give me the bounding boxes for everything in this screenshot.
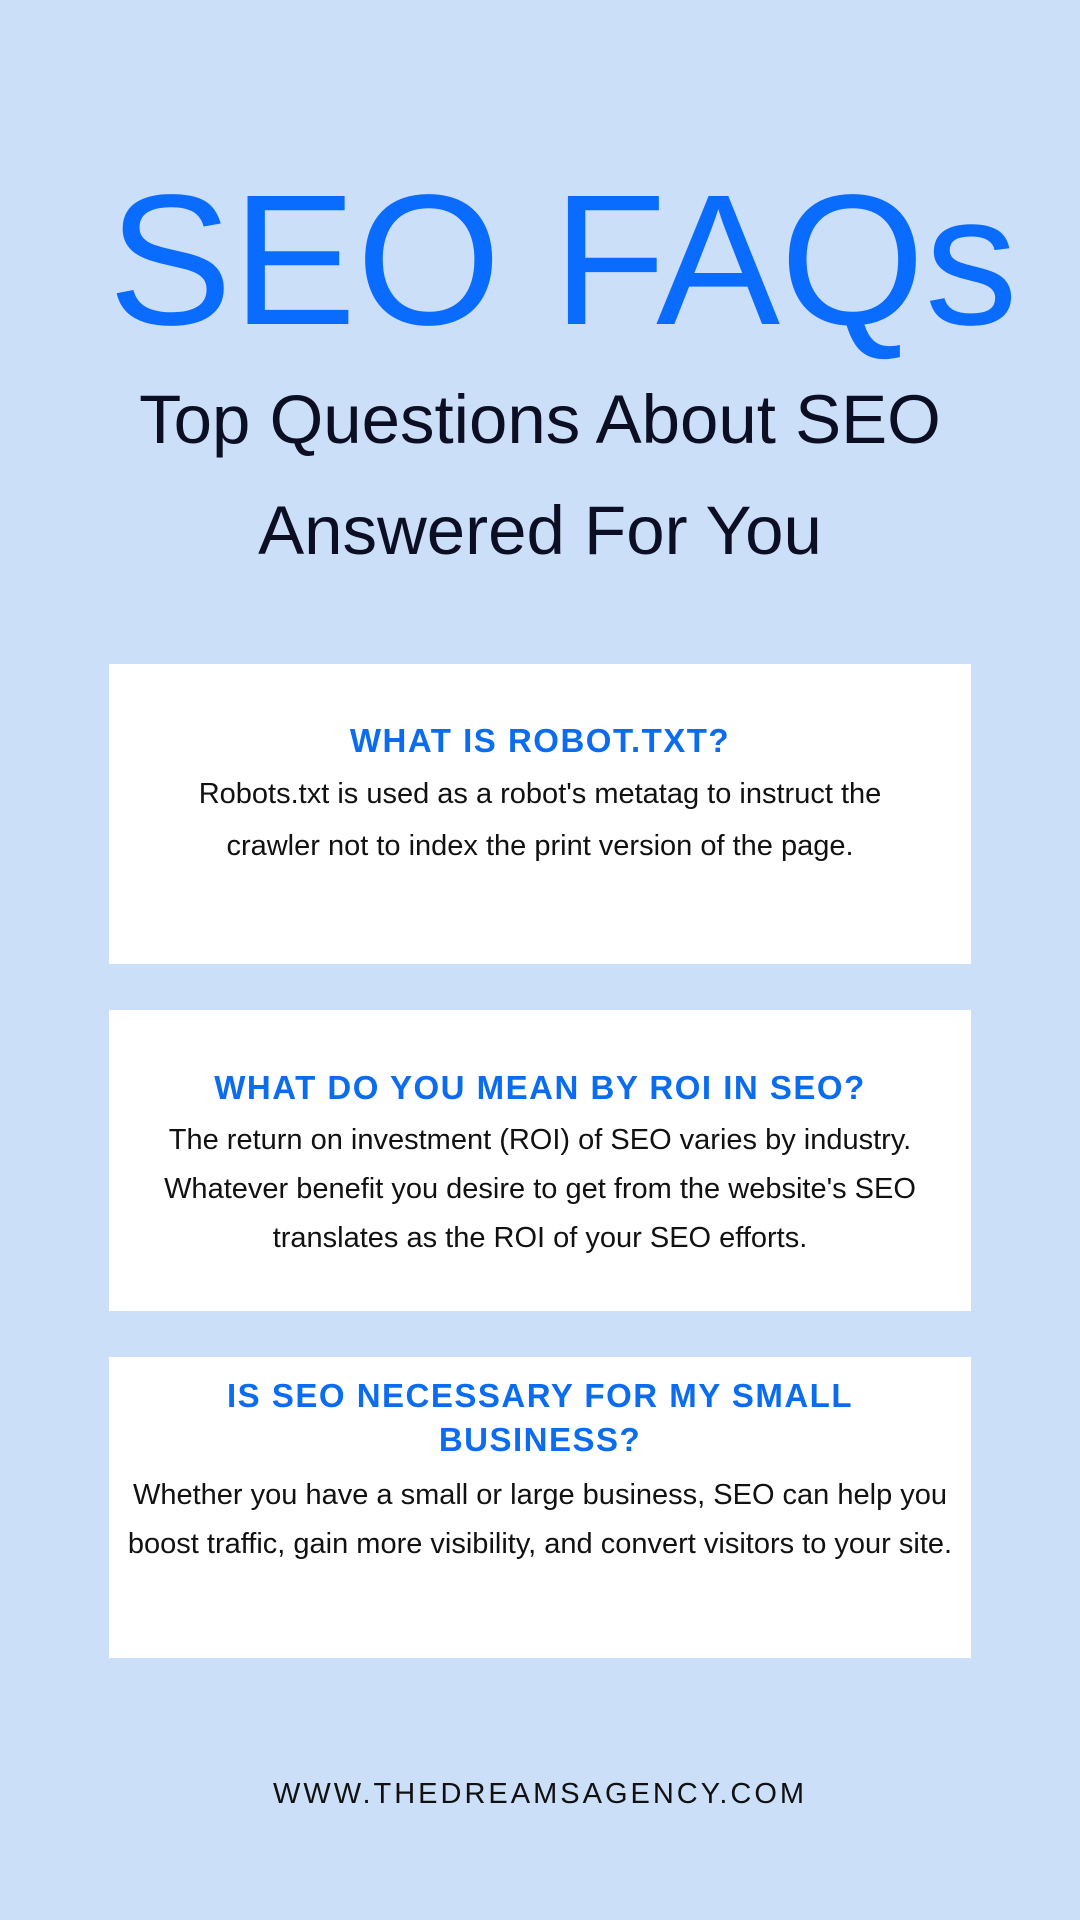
panel: small business <box>109 1357 971 1658</box>
text: small business answer: boost traffic, gain more visibility, and convert visitors to your site. <box>128 1528 952 1560</box>
footer url: WWW.THEDREAMSAGENCY.COM <box>273 1778 807 1810</box>
panel: robot.txt <box>109 664 971 964</box>
heading: small business: IS SEO NECESSARY FOR MY SMALL <box>227 1377 853 1414</box>
heading: ROI: WHAT DO YOU MEAN BY ROI IN SEO? <box>214 1069 866 1106</box>
title: SEO FAQs <box>108 157 1018 364</box>
subtitle <box>139 381 941 569</box>
text: ROI answer: translates as the ROI of your SEO efforts. <box>273 1222 807 1254</box>
text: small business answer: Whether you have a small or large business, SEO can help you <box>133 1479 947 1511</box>
heading: small business: BUSINESS? <box>439 1421 641 1458</box>
text: robot.txt answer <box>199 778 881 862</box>
subtitle: Top Questions About SEO <box>139 381 941 458</box>
subtitle: Answered For You <box>258 492 822 569</box>
text: small business answer <box>128 1479 952 1560</box>
text: ROI answer: Whatever benefit you desire to get from the website's SEO <box>164 1173 916 1205</box>
heading: small business <box>227 1377 853 1458</box>
text: ROI answer <box>164 1124 916 1254</box>
heading: robot.txt: WHAT IS ROBOT.TXT? <box>350 722 730 759</box>
text: ROI answer: The return on investment (ROI) of SEO varies by industry. <box>169 1124 911 1156</box>
panel: ROI <box>109 1010 971 1311</box>
text: robot.txt answer: crawler not to index the print version of the page. <box>226 830 854 862</box>
text: robot.txt answer: Robots.txt is used as a robot's metatag to instruct the <box>199 778 881 810</box>
